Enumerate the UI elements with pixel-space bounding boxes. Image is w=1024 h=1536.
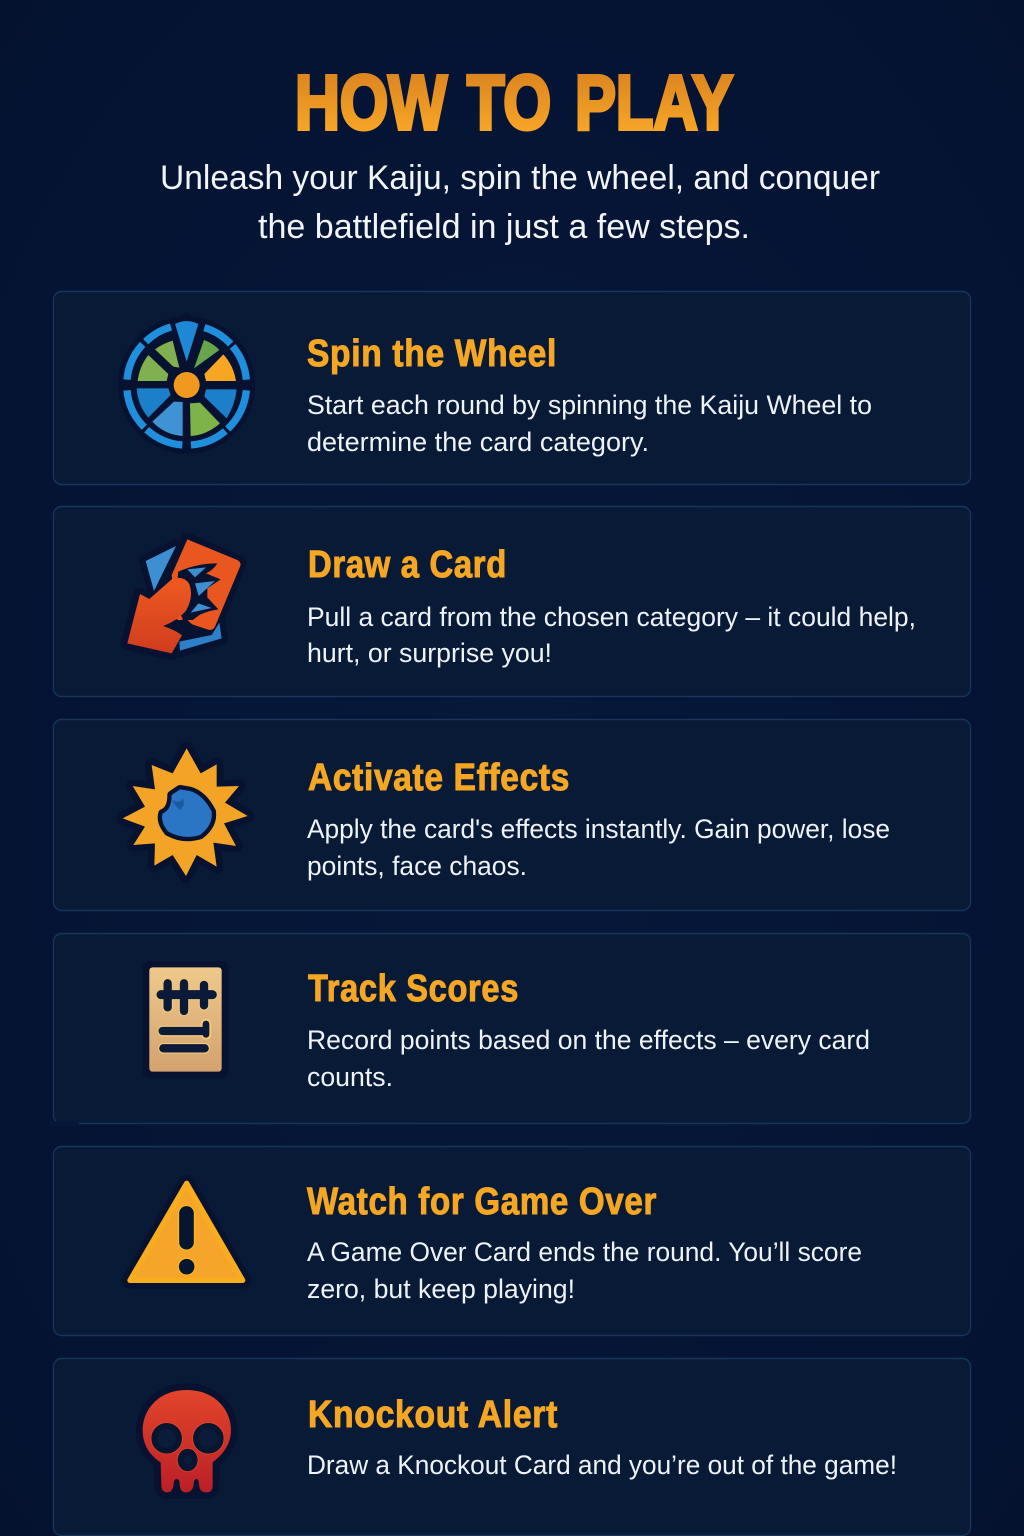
description xyxy=(307,814,890,881)
heading: Watch for Game Over xyxy=(307,1181,657,1223)
title: TO xyxy=(467,60,551,146)
description: zero, but keep playing! xyxy=(307,1274,575,1304)
description xyxy=(307,1237,862,1304)
icon: score sheet xyxy=(143,961,228,1078)
panel: draw a card xyxy=(54,506,970,696)
icon: skull xyxy=(143,1390,231,1492)
title: PLAY xyxy=(575,60,733,146)
description: Start each round by spinning the Kaiju Wheel to xyxy=(307,390,872,420)
heading: Draw a Card xyxy=(308,544,507,586)
description: determine the card category. xyxy=(307,427,649,457)
description: Pull a card from the chosen category – it could help, xyxy=(307,602,916,632)
description: points, face chaos. xyxy=(307,851,527,881)
description xyxy=(307,1025,870,1092)
title xyxy=(295,60,733,146)
panel: watch for game over xyxy=(54,1146,970,1336)
panel: knockout alert xyxy=(54,1358,970,1536)
panel: activate effects xyxy=(54,720,970,910)
subtitle: Unleash your Kaiju, spin the wheel, and conquer xyxy=(160,159,880,197)
title: HOW xyxy=(295,60,447,146)
panel: track scores xyxy=(50,934,970,1126)
panel: spin the wheel xyxy=(54,292,970,484)
description xyxy=(307,390,872,457)
heading: Spin the Wheel xyxy=(307,333,557,375)
icon: hand holding card xyxy=(127,539,241,653)
description: Draw a Knockout Card and you’re out of the game! xyxy=(307,1450,897,1480)
description xyxy=(307,602,916,668)
subtitle xyxy=(160,159,880,246)
subtitle: the battlefield in just a few steps. xyxy=(258,208,750,246)
icon: warning triangle xyxy=(130,1183,243,1280)
heading: Activate Effects xyxy=(308,757,570,799)
heading: Track Scores xyxy=(308,968,519,1010)
description: A Game Over Card ends the round. You’ll score xyxy=(307,1237,862,1267)
icon: wheel xyxy=(118,313,255,454)
description: Record points based on the effects – every card xyxy=(307,1025,870,1055)
heading: Knockout Alert xyxy=(308,1394,558,1436)
description: counts. xyxy=(307,1062,393,1092)
description: hurt, or surprise you! xyxy=(307,638,552,668)
icon: impact burst xyxy=(123,748,248,876)
description: Apply the card's effects instantly. Gain power, lose xyxy=(307,814,890,844)
